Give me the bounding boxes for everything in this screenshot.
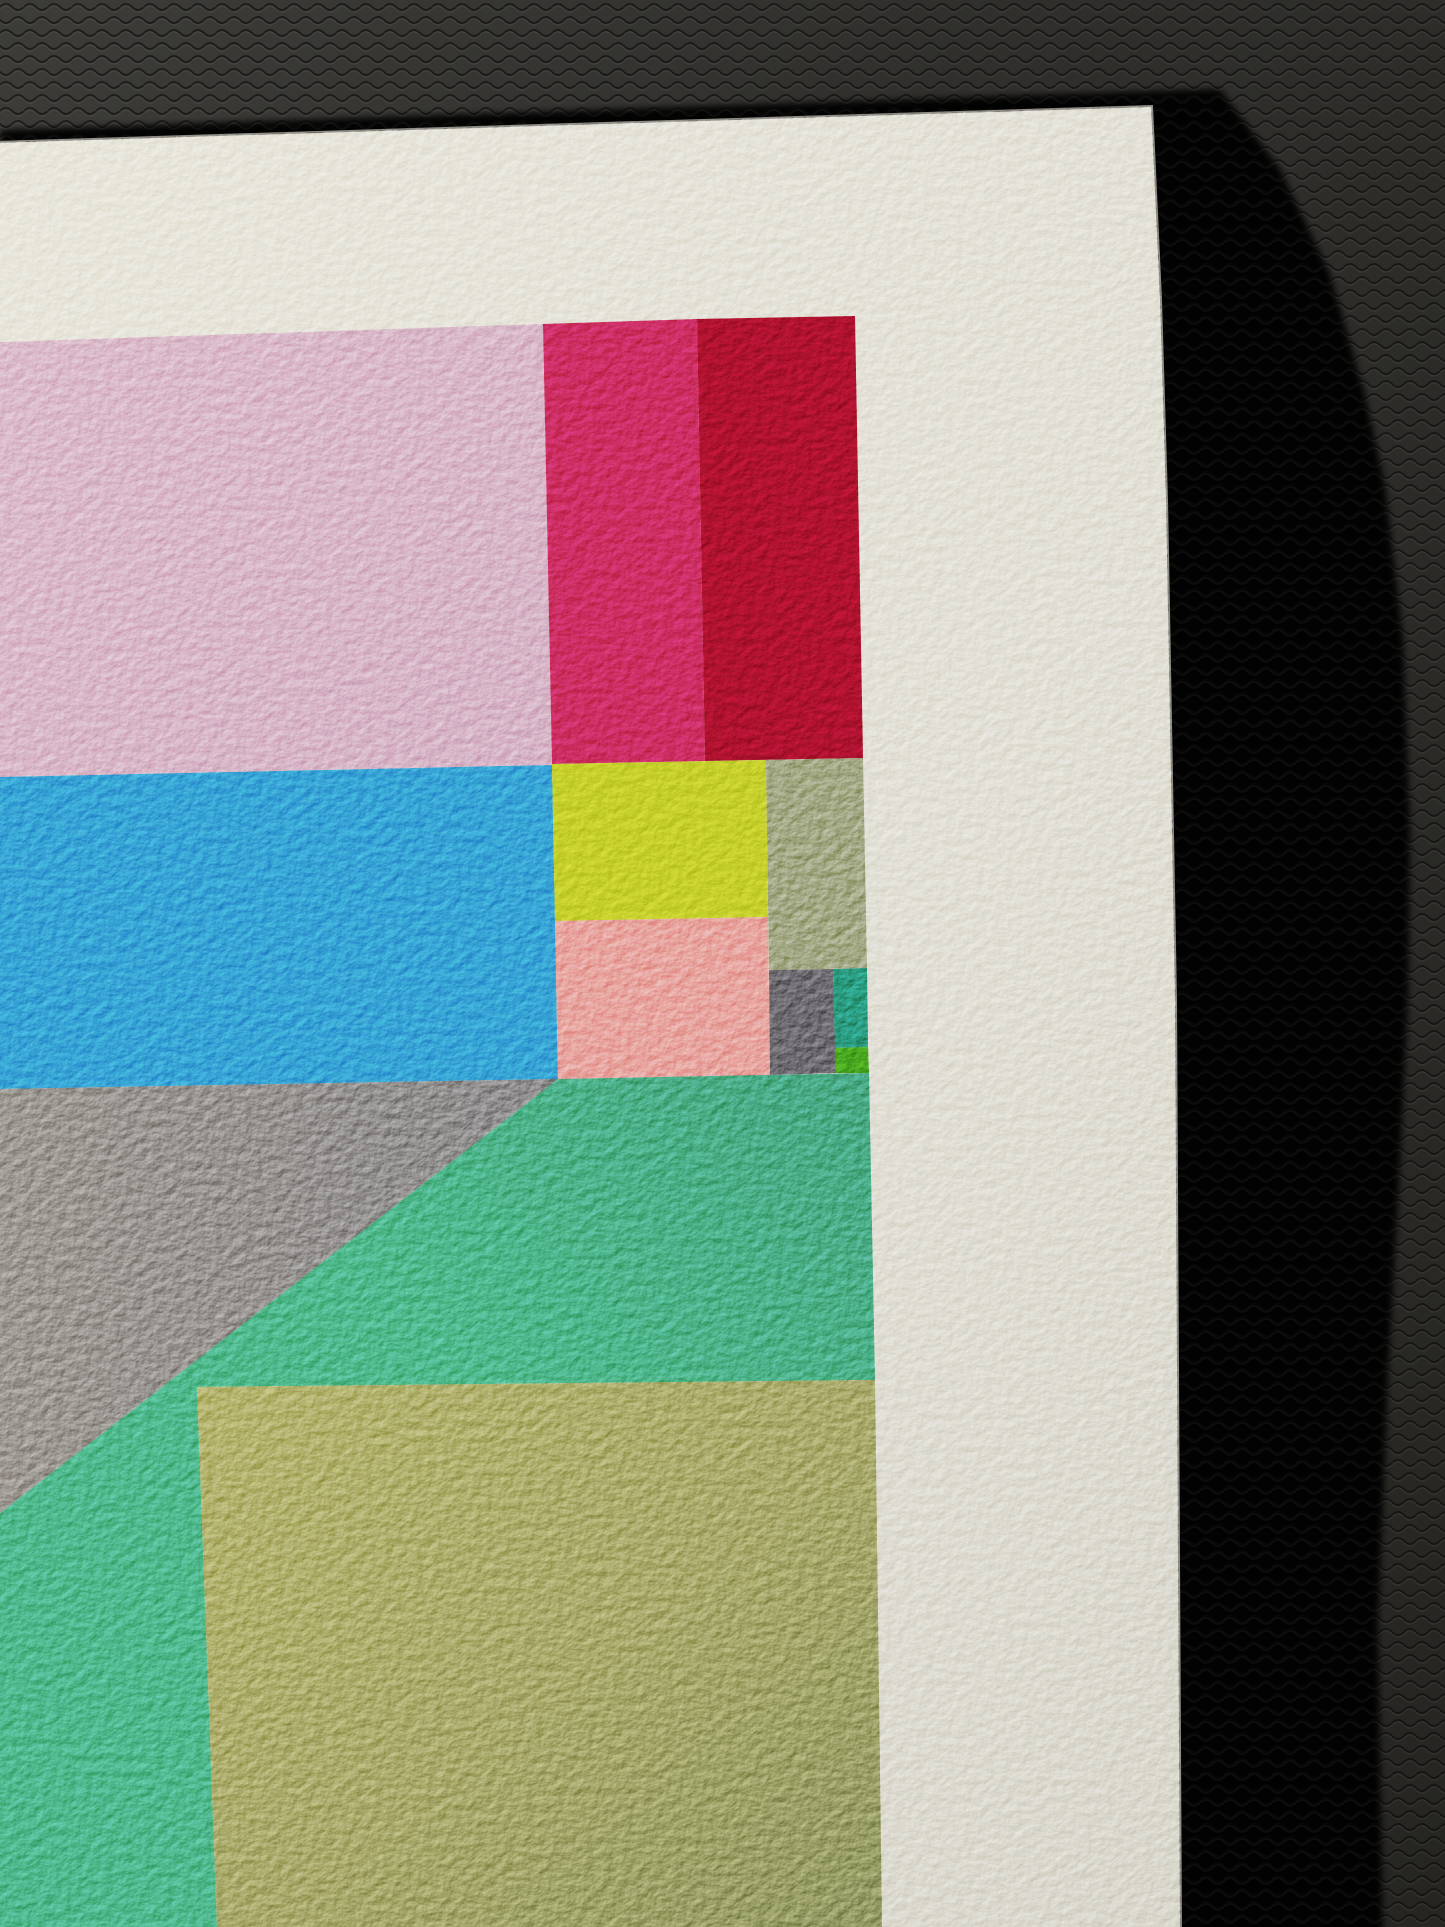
block: sage [766, 758, 867, 970]
block: acid yellow [552, 760, 768, 921]
print: colour block composition [0, 316, 882, 1927]
block: magenta [543, 319, 705, 764]
paper grain texture overlay [0, 106, 1181, 1927]
block: small green [835, 1047, 869, 1073]
block: crimson [697, 316, 863, 761]
block: grey triangle [0, 1079, 558, 1513]
block: salmon [555, 917, 770, 1079]
block: pale pink [0, 324, 552, 777]
block: dark grey [769, 969, 836, 1075]
block: mint green [0, 1073, 875, 1927]
block: teal [833, 968, 868, 1048]
paper sheet [0, 106, 1181, 1927]
block: olive [197, 1380, 882, 1927]
block: sky blue [0, 765, 558, 1089]
